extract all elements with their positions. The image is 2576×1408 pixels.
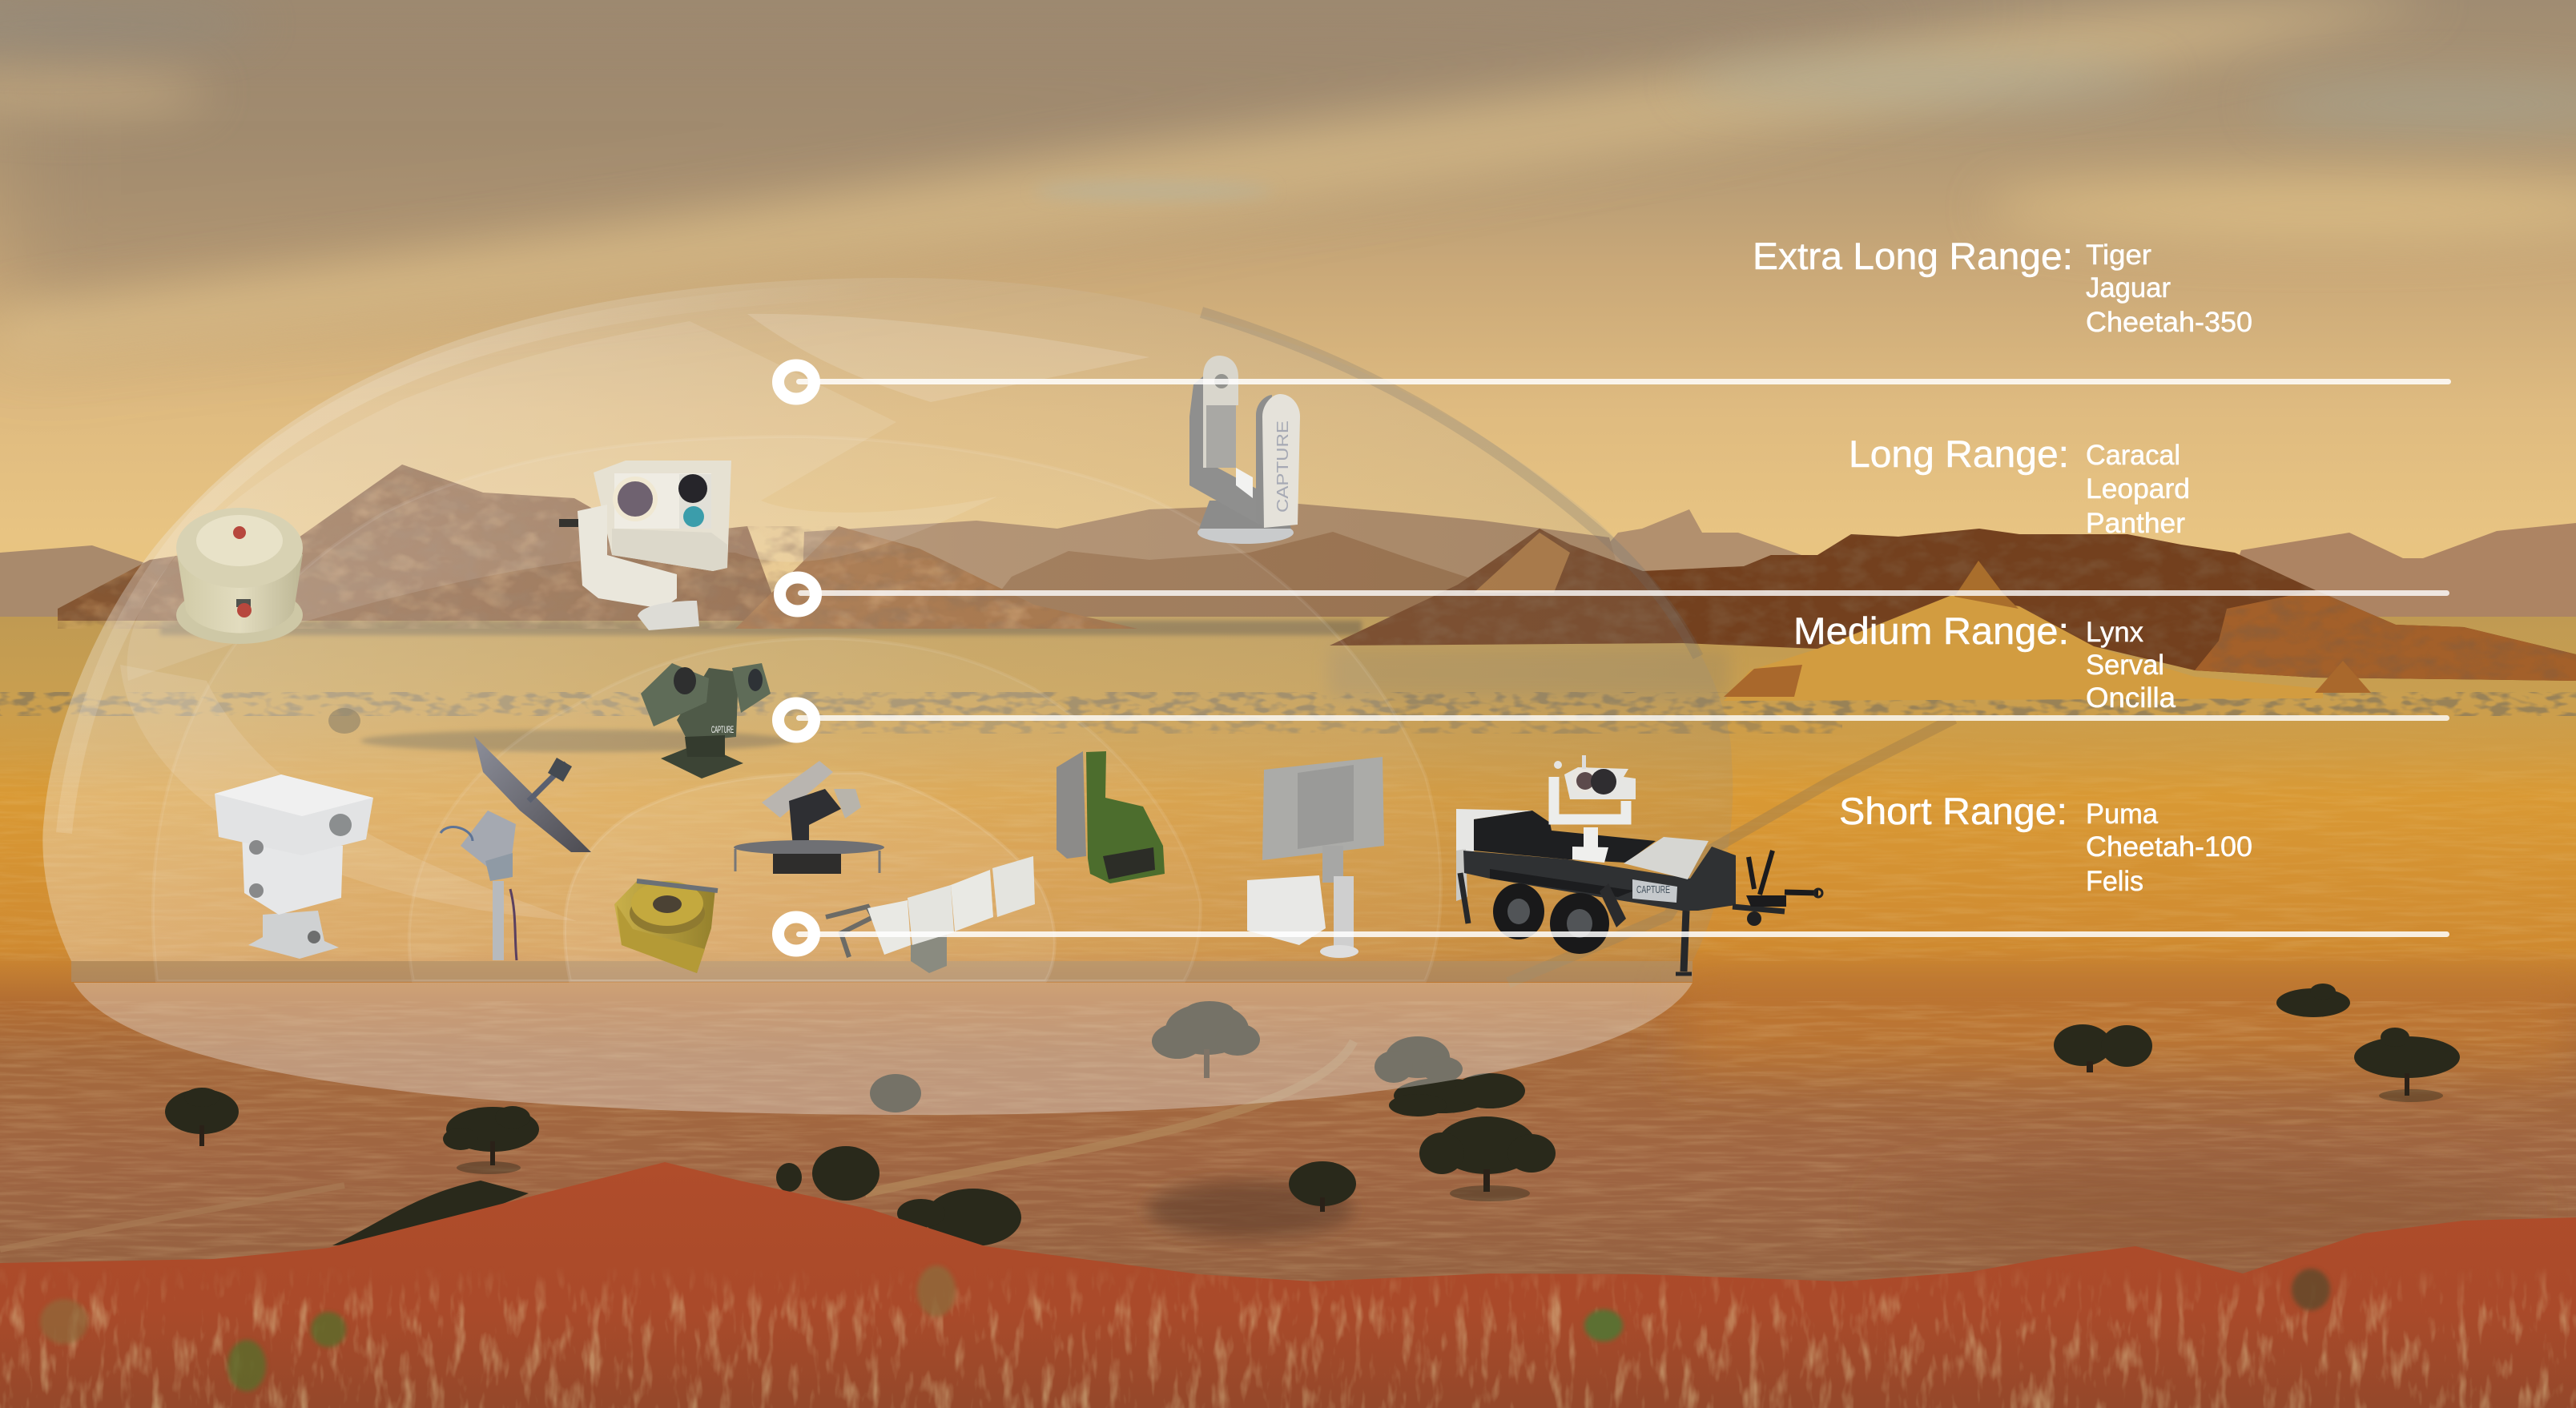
range line: long (780, 577, 2449, 611)
label: medium range: Medium Range: (1793, 609, 2069, 652)
label: medium range: Oncilla (2086, 682, 2176, 714)
label: extra long range: Extra Long Range: (1753, 235, 2073, 277)
label: long range: Panther (2086, 508, 2185, 539)
label: long range: Long Range: (1849, 432, 2069, 475)
glass reflection: crescent (120, 665, 577, 921)
dome rim highlight (64, 290, 896, 833)
label: long range: Leopard (2086, 473, 2190, 505)
outer range dome (42, 278, 1733, 1115)
label: short range: Short Range: (1839, 790, 2067, 832)
label: short range (1839, 790, 2252, 897)
range line: extra long (779, 365, 2451, 399)
product: green thermal camera (641, 663, 771, 778)
glass reflection: upper (747, 314, 1149, 402)
label: long range (1849, 432, 2190, 539)
medium range dome (409, 638, 1201, 981)
dome glass (42, 278, 1733, 961)
label: extra long range (1753, 235, 2252, 338)
label: extra long range: Cheetah-350 (2086, 307, 2252, 338)
dome lower bowl (74, 983, 1693, 1115)
product: satellite dish (441, 736, 591, 960)
range line: short (779, 917, 2449, 951)
product: panel array (826, 856, 1035, 973)
product: U-bracket positioner (1189, 356, 1300, 544)
product: radar on turntable (734, 761, 884, 874)
label: long range: Caracal (2086, 440, 2180, 471)
background: distant mountains (0, 504, 2576, 633)
label: short range: Puma (2086, 799, 2159, 830)
product: green thermal camera: CAPTURE (711, 724, 734, 735)
label: medium range (1793, 609, 2176, 714)
glass reflection: left (127, 321, 997, 681)
label: extra long range: Jaguar (2086, 272, 2171, 304)
short range dome (565, 773, 1055, 981)
label: extra long range: Tiger (2086, 239, 2151, 271)
label: short range: Felis (2086, 866, 2143, 897)
background: sky (0, 0, 2576, 633)
product: trailer with camera mast (1456, 755, 1822, 974)
range line: medium (779, 703, 2449, 737)
background: foreground mountains (58, 457, 2576, 701)
logo: capture: CAPTURE (1274, 420, 1292, 513)
dome base band (71, 961, 1693, 982)
background: red dune and grass (0, 1162, 2576, 1408)
label: medium range: Lynx (2086, 617, 2143, 648)
product: white pedestal camera (215, 774, 373, 959)
product: multi-sensor camera (559, 461, 731, 630)
background: trees (165, 984, 2460, 1246)
logo: capture: CAPTURE (1636, 883, 1670, 895)
product: cream positioner (176, 508, 303, 644)
background: desert plain (0, 617, 2576, 1281)
product: gold gimbal (614, 880, 718, 973)
label: medium range: Serval (2086, 650, 2164, 681)
dome rim shade (1201, 312, 1698, 657)
mid-long range dome (153, 436, 1441, 981)
product: gray panel on mast (1247, 757, 1384, 958)
product: green radar unit (1057, 751, 1165, 883)
label: short range: Cheetah-100 (2086, 831, 2252, 863)
